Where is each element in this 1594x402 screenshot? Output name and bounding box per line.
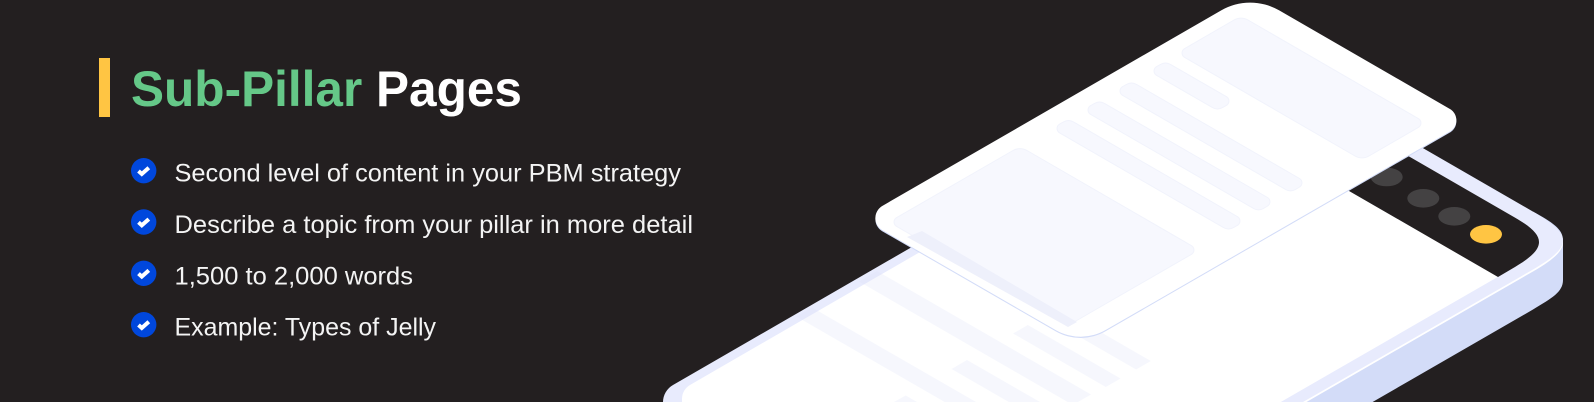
bullet 2: Describe a topic from your pillar in more detail [174,211,693,239]
bullet 1: Second level of content in your PBM strategy [174,160,681,188]
header dot active [1470,225,1502,244]
panel text line 2 [1120,83,1302,191]
panel text line 3 [1088,102,1270,210]
header dot 3 [1438,207,1470,226]
bullet 3: 1,500 to 2,000 words [174,262,413,290]
screen content bars [796,271,1151,402]
bullet list [131,158,693,342]
header dot 2 [1407,189,1439,208]
screen header bar [1188,63,1539,277]
floating panel shadow edge [875,4,1456,338]
device side wall [1303,212,1563,402]
header dot 1 [1371,168,1403,186]
panel image block bottom [894,149,1194,323]
panel image block top [1182,18,1421,158]
illustration: isometric device [663,3,1563,402]
heading accent bar [99,58,110,117]
see-through band [907,231,1077,327]
device top surface [663,50,1563,402]
panel contents [894,18,1421,323]
device screen [682,63,1539,402]
device edge highlight [1300,214,1563,402]
bullet 4: Example: Types of Jelly [174,314,436,342]
title: Sub-Pillar Pages [131,61,522,117]
panel text line 4 [1057,121,1240,229]
floating panel [875,3,1456,337]
panel text line 1 [1154,63,1229,109]
